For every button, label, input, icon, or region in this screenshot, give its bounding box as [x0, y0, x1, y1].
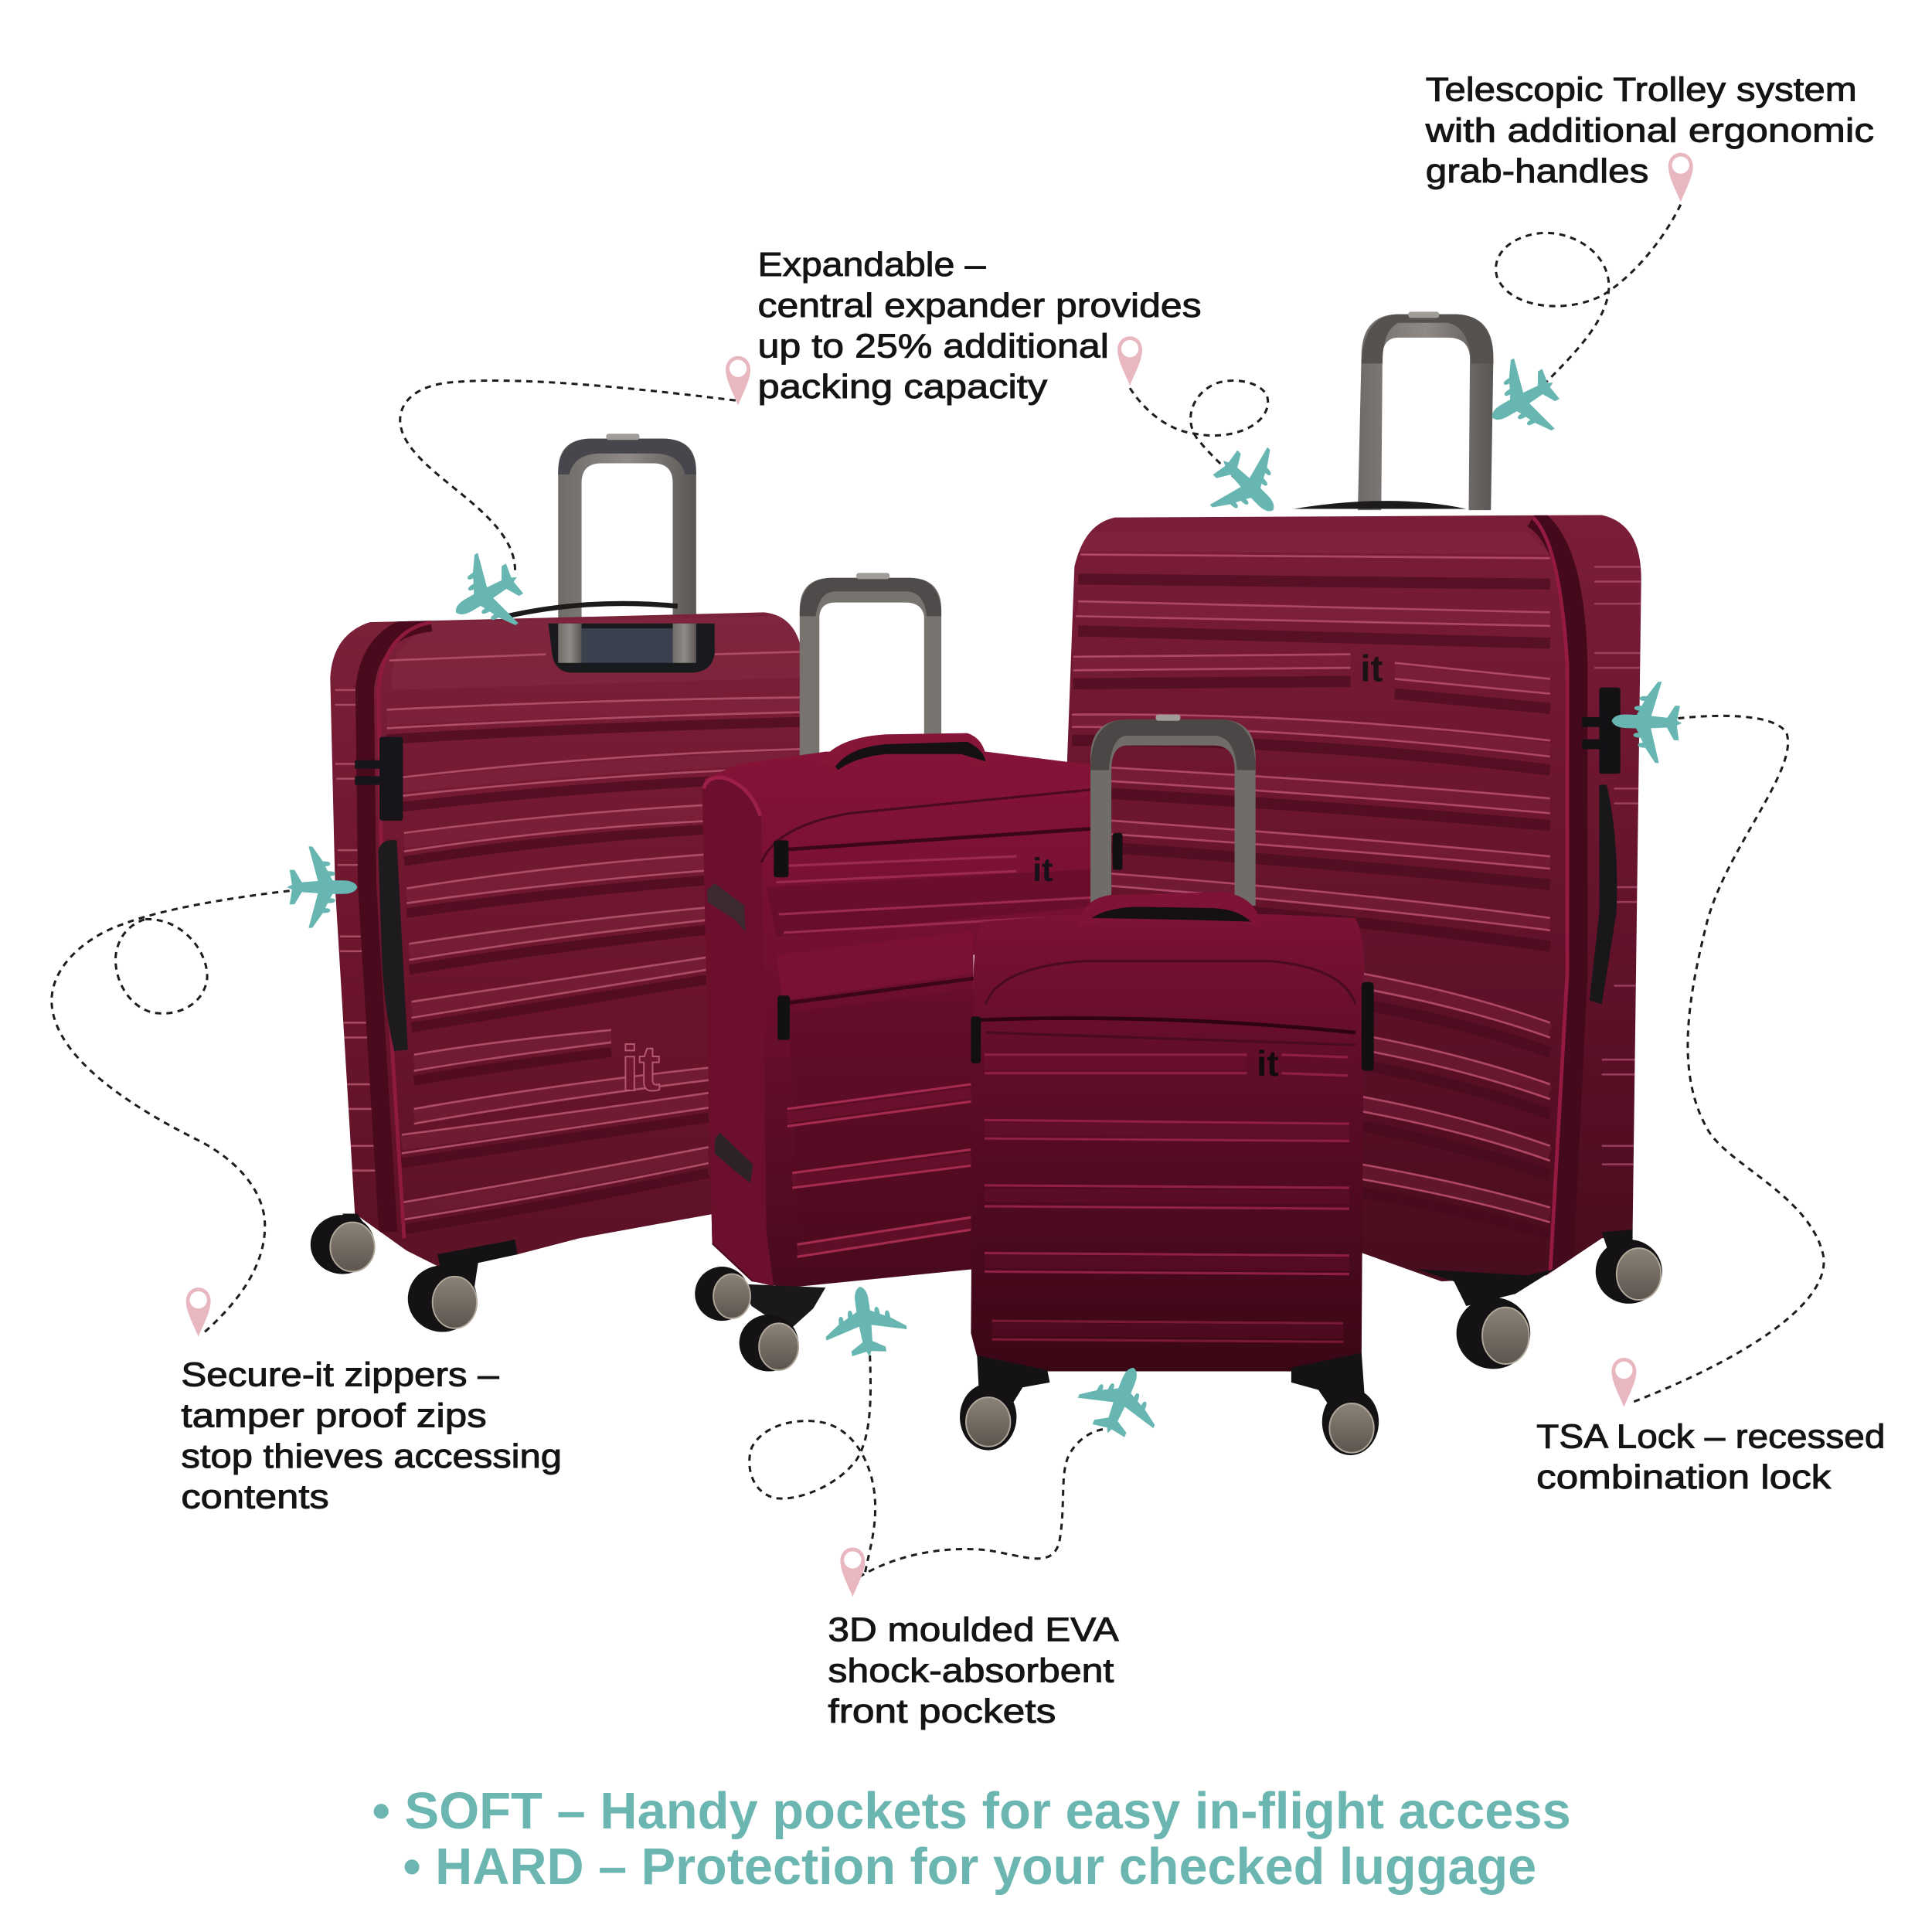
top carry handle	[508, 604, 678, 616]
side handle	[378, 840, 408, 1051]
handle recess	[549, 624, 715, 673]
icon: plane, TSA lock	[1611, 680, 1683, 764]
telescopic handle, left case	[558, 434, 696, 665]
large hard suitcase, front view, right	[1067, 311, 1662, 1369]
wheels, right case	[1417, 1230, 1662, 1369]
wheels, left case	[311, 1213, 518, 1332]
telescopic handle, right case	[1358, 311, 1493, 510]
telescopic handle, small case	[1090, 715, 1256, 906]
icon: pin, expander right	[1117, 336, 1142, 386]
zip pulls	[971, 833, 1374, 1071]
icon: plane, pocket left	[820, 1281, 910, 1362]
dashed flight paths	[52, 205, 1824, 1577]
side panel highlight	[703, 777, 760, 815]
callout: expandable: Expandable –	[758, 246, 986, 284]
callout: secure-it zippers	[181, 1356, 562, 1516]
headline: soft and hard benefits: • HARD – Protection for your checked luggage	[403, 1838, 1536, 1896]
fabric body	[971, 914, 1364, 1372]
callout: expandable: packing capacity	[758, 368, 1047, 406]
top panel seams and front pocket zip	[974, 961, 1355, 1045]
callout: telescopic trolley: grab-handles	[1426, 152, 1648, 190]
icon: plane, expander	[1195, 432, 1302, 539]
icon: pin, expander left	[726, 356, 750, 406]
carry handle	[821, 733, 987, 770]
wheels, small case	[960, 1353, 1379, 1455]
shell ribs	[335, 616, 801, 1238]
front ribs	[985, 1055, 1349, 1342]
embossed it logo: it	[621, 1032, 660, 1104]
icon: plane, top left case	[436, 542, 537, 648]
callout: secure-it zippers: Secure-it zippers –	[181, 1356, 499, 1394]
combination lock	[355, 736, 403, 821]
wheels, medium case	[695, 1267, 825, 1372]
zip pulls	[774, 840, 790, 1040]
it logo, small case: it	[1257, 1043, 1279, 1083]
it logo, medium case: it	[1032, 852, 1053, 889]
medium soft suitcase	[695, 573, 1109, 1372]
top carry handle	[1294, 501, 1466, 509]
icon: plane, zippers	[287, 846, 357, 928]
callout: secure-it zippers: tamper proof zips	[181, 1396, 487, 1434]
callout: telescopic trolley	[1425, 71, 1874, 190]
callout: TSA lock: combination lock	[1536, 1458, 1831, 1496]
side handle	[1590, 784, 1617, 1004]
callout: TSA lock: TSA Lock – recessed	[1536, 1417, 1885, 1455]
callout: expandable: up to 25% additional	[758, 327, 1109, 365]
carry handle	[1078, 892, 1260, 927]
telescopic handle, medium case	[800, 573, 941, 770]
pocket seams and ribs	[761, 788, 1103, 1284]
callout: EVA pockets: front pockets	[828, 1692, 1056, 1730]
large hard suitcase, rear view, left	[311, 434, 804, 1332]
side grab handles	[707, 883, 753, 1183]
icon: plane, pocket right	[1070, 1352, 1172, 1448]
callout: TSA lock	[1536, 1417, 1885, 1496]
callout: EVA pockets	[828, 1611, 1120, 1730]
headline: soft and hard benefits: • SOFT – Handy pockets for easy in-flight access	[372, 1782, 1571, 1840]
icon: pin, EVA pockets	[840, 1548, 865, 1597]
shell ribs	[1072, 518, 1641, 1275]
combination lock	[1582, 688, 1621, 774]
callout: expandable	[758, 246, 1202, 406]
small soft underseat case	[960, 715, 1379, 1455]
callout: telescopic trolley: Telescopic Trolley system	[1426, 71, 1857, 109]
callout: expandable: central expander provides	[758, 287, 1202, 325]
callout: EVA pockets: shock-absorbent	[828, 1651, 1114, 1689]
icon: pin, zippers	[186, 1287, 211, 1337]
fabric body	[702, 752, 1109, 1287]
callout: EVA pockets: 3D moulded EVA	[828, 1611, 1120, 1649]
icon: plane, trolley	[1472, 347, 1573, 453]
shell body	[1067, 515, 1641, 1281]
callout: secure-it zippers: stop thieves accessing	[181, 1437, 562, 1475]
headline: soft and hard benefits	[372, 1782, 1571, 1896]
callout: telescopic trolley: with additional ergonomic	[1425, 111, 1874, 149]
it logo, right case: it	[1360, 649, 1383, 690]
shell body	[330, 612, 804, 1269]
icon: pin, trolley	[1668, 153, 1693, 202]
icon: pin, TSA lock	[1611, 1358, 1636, 1407]
side panel	[702, 777, 774, 1287]
callout: secure-it zippers: contents	[181, 1478, 329, 1516]
